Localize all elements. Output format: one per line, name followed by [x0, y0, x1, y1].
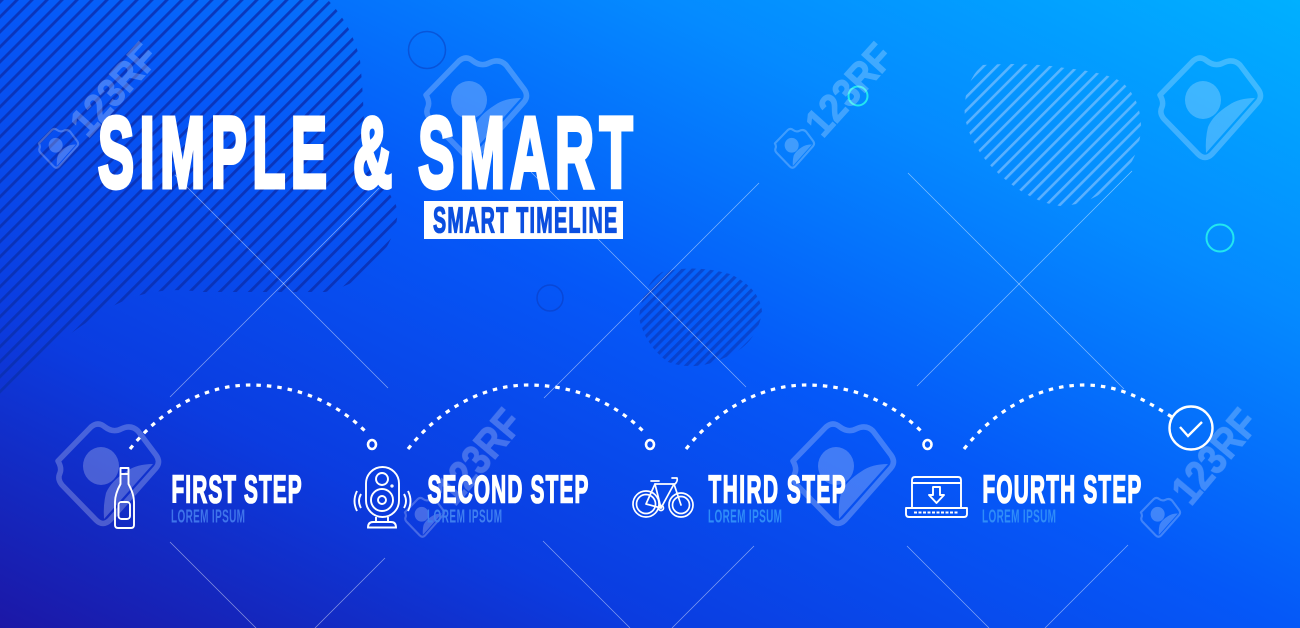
step caption: LOREM IPSUM [427, 508, 502, 527]
hatched blob: centre [639, 268, 762, 366]
watermark: stock logos: 123RF [1162, 400, 1267, 513]
step title: FIRST STEP [172, 468, 302, 511]
timeline node circles [368, 440, 932, 449]
step caption: LOREM IPSUM [982, 508, 1056, 527]
watermark: stock logos: 123RF [426, 400, 531, 513]
watermark: stock logos [39, 35, 1267, 537]
title: SIMPLE & SMART [98, 97, 633, 209]
icon: laptop download [906, 477, 967, 517]
end check mark [1170, 406, 1212, 450]
dashed timeline arcs [130, 385, 1172, 449]
thin crossing lines [170, 171, 1132, 628]
step 2: second step [354, 467, 588, 528]
hatched blob: top right [965, 64, 1141, 206]
hatched blob: top left [0, 0, 397, 396]
step title: SECOND STEP [428, 468, 588, 511]
step 3: third step [633, 468, 846, 527]
step 1: first step [115, 468, 302, 528]
subtitle badge: SMART TIMELINE [433, 200, 617, 241]
step caption: LOREM IPSUM [171, 508, 245, 527]
watermark: stock logos: 123RF [62, 35, 167, 145]
step title: THIRD STEP [708, 468, 846, 511]
icon: beer bottle [115, 468, 134, 528]
step 4: fourth step [906, 468, 1141, 527]
decorative circles [408, 32, 1234, 311]
watermark: stock logos: 123RF [797, 35, 902, 145]
step title: FOURTH STEP [982, 468, 1141, 511]
step caption: LOREM IPSUM [708, 508, 782, 527]
icon: bicycle [633, 478, 693, 517]
icon: speaker [354, 467, 410, 528]
